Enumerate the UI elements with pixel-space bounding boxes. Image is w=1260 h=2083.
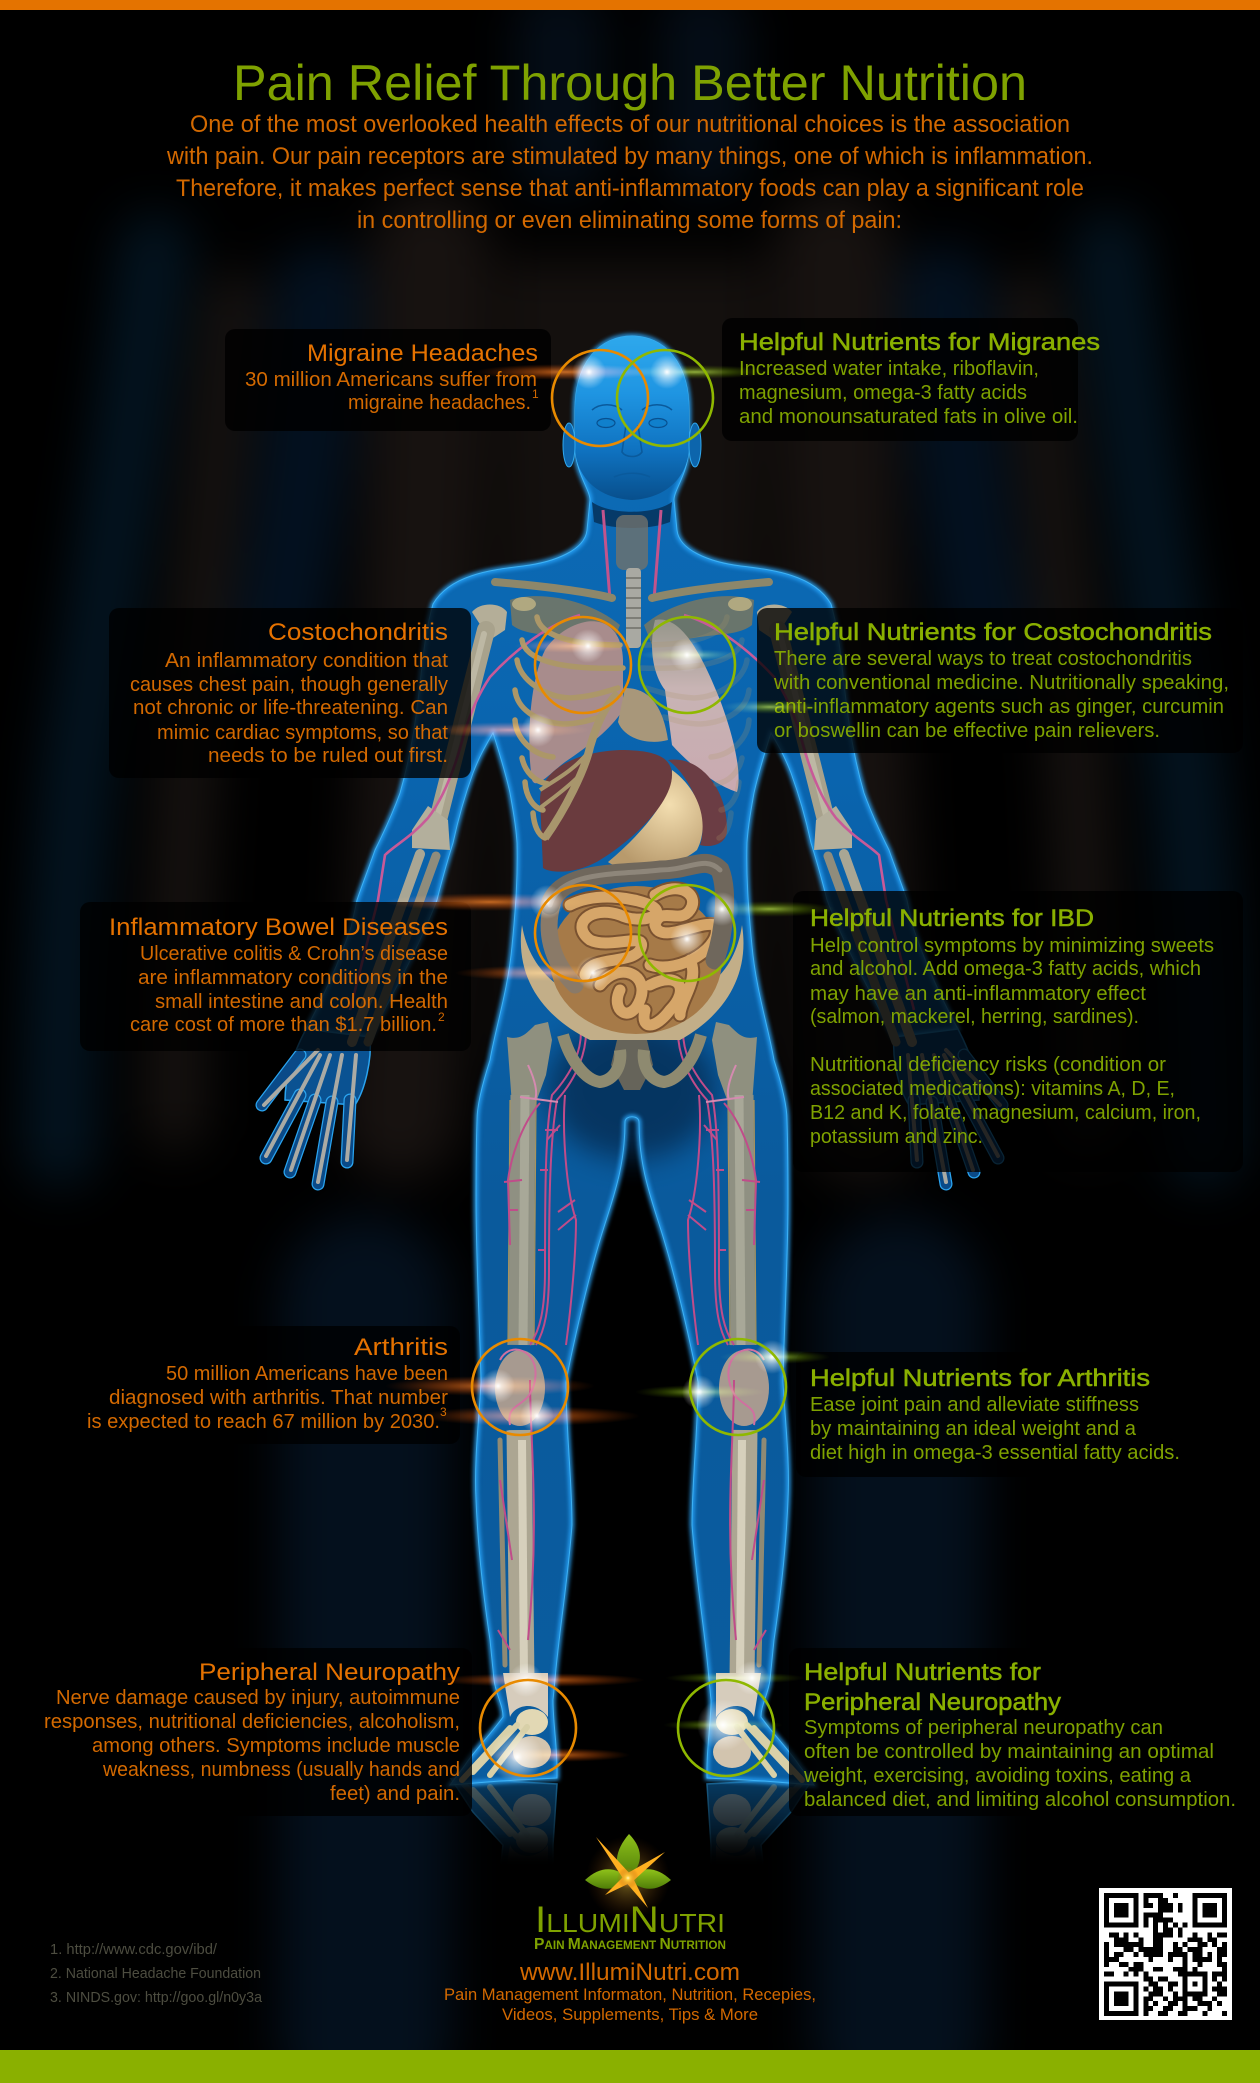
heading: Helpful Nutrients for Migranes	[739, 329, 1100, 356]
footnotes: 2. National Headache Foundation	[50, 1966, 261, 1982]
top bar	[0, 0, 1260, 10]
panel: peripheral neuropathy: weakness, numbness (usually hands and	[102, 1759, 460, 1781]
panel: nutrients for peripheral neuropathy: balanced diet, and limiting alcohol consumption.	[804, 1789, 1236, 1811]
ribcage	[515, 617, 749, 838]
panel: arthritis: 3	[440, 1405, 447, 1419]
heading: Peripheral Neuropathy	[199, 1659, 460, 1686]
panel: peripheral neuropathy: feet) and pain.	[330, 1783, 460, 1805]
heading: Arthritis	[354, 1334, 448, 1361]
text block: Ease joint pain and alleviate stiffness	[810, 1394, 1139, 1416]
heading: Helpful Nutrients for	[804, 1659, 1041, 1686]
panel: migraine headaches: 1	[532, 387, 539, 401]
liver	[540, 750, 672, 872]
panel: nutrients for migraines: magnesium, omega-3 fatty acids	[739, 382, 1027, 404]
target circles: orange	[472, 350, 648, 1776]
website and description: www.IllumiNutri.com	[519, 1959, 740, 1986]
heading: Helpful Nutrients for Costochondritis	[774, 619, 1212, 646]
panel: migraine headaches	[225, 329, 551, 431]
text block: Help control symptoms by minimizing sweets	[810, 935, 1214, 957]
panel: costochondritis: causes chest pain, though generally	[130, 674, 448, 696]
panel: nutrients for peripheral neuropathy: often be controlled by maintaining an optimal	[804, 1741, 1214, 1763]
skeleton	[350, 582, 914, 1780]
title: Pain Relief Through Better Nutrition	[233, 55, 1027, 111]
pelvic bowl	[521, 925, 743, 1040]
footnotes: 1. http://www.cdc.gov/ibd/	[50, 1942, 218, 1958]
left lung	[529, 621, 623, 783]
panel: nutrients for IBD: may have an anti-inflammatory effect	[810, 983, 1146, 1005]
panel: nutrients for costochondritis	[757, 608, 1243, 753]
panel: arthritis	[80, 1326, 460, 1444]
panel: nutrients for migraines	[722, 318, 1100, 441]
text block: Nerve damage caused by injury, autoimmune	[56, 1687, 460, 1709]
panel: nutrients for arthritis	[796, 1352, 1196, 1477]
heading: Migraine Headaches	[307, 340, 538, 367]
panel: nutrients for IBD	[793, 891, 1243, 1172]
panel: inflammatory bowel diseases: small intestine and colon. Health	[155, 991, 448, 1013]
panel: nutrients for IBD: (salmon, mackerel, herring, sardines).	[810, 1006, 1139, 1028]
intro text	[166, 111, 1093, 234]
panel: arthritis: is expected to reach 67 million by 2030.	[87, 1411, 440, 1433]
text block: Symptoms of peripheral neuropathy can	[804, 1717, 1163, 1739]
logo tagline: PAIN MANAGEMENT NUTRITION	[534, 1936, 726, 1953]
heading: Inflammatory Bowel Diseases	[109, 914, 448, 941]
panel: nutrients for peripheral neuropathy: weight, exercising, avoiding toxins, eating a	[803, 1765, 1192, 1787]
target circles: green	[617, 350, 786, 1776]
panel: inflammatory bowel diseases: care cost of more than $1.7 billion.	[130, 1014, 437, 1036]
panel: inflammatory bowel diseases: 2	[438, 1010, 445, 1024]
head	[563, 336, 701, 500]
QR code	[1099, 1888, 1232, 2020]
panel: nutrients for IBD: Nutritional deficiency risks (condition or	[810, 1054, 1166, 1076]
panel: nutrients for arthritis: by maintaining an ideal weight and a	[810, 1418, 1137, 1440]
text block: Increased water intake, riboflavin,	[739, 358, 1039, 380]
bottom bar	[0, 2050, 1260, 2083]
heading: Helpful Nutrients for Arthritis	[810, 1365, 1150, 1392]
footnotes	[50, 1942, 263, 2006]
panel: nutrients for migraines: and monounsaturated fats in olive oil.	[739, 406, 1078, 428]
intro text: in controlling or even eliminating some forms of pain:	[357, 207, 902, 234]
logo mark	[585, 1834, 671, 1920]
panel: nutrients for costochondritis: with conventional medicine. Nutritionally speaking,	[773, 672, 1229, 694]
spleen	[668, 760, 727, 846]
body silhouette	[306, 336, 958, 1785]
foot reflections	[450, 1778, 813, 1854]
text block: 50 million Americans have been	[166, 1363, 448, 1385]
panel: peripheral neuropathy	[30, 1648, 472, 1816]
panel: arthritis: diagnosed with arthritis. That number	[109, 1387, 448, 1409]
panel: nutrients for peripheral neuropathy: Peripheral Neuropathy	[804, 1689, 1061, 1716]
panel: costochondritis: mimic cardiac symptoms, so that	[157, 722, 448, 744]
intro text: with pain. Our pain receptors are stimulated by many things, one of which is inflammation.	[166, 143, 1093, 170]
logo: IllumiNutri	[534, 1834, 726, 1953]
panel: inflammatory bowel diseases: are inflammatory conditions in the	[138, 967, 448, 989]
panel: nutrients for costochondritis: anti-inflammatory agents such as ginger, curcumin	[774, 696, 1224, 718]
panel: migraine headaches: migraine headaches.	[348, 392, 531, 414]
panel: costochondritis	[109, 608, 471, 778]
footnotes: 3. NINDS.gov: http://goo.gl/n0y3a	[50, 1990, 263, 2006]
right lung	[652, 620, 739, 792]
trachea	[626, 568, 641, 648]
stomach	[608, 770, 703, 868]
panel: nutrients for IBD: potassium and zinc.	[810, 1126, 983, 1148]
heading: Helpful Nutrients for IBD	[810, 905, 1094, 932]
panel: peripheral neuropathy: among others. Symptoms include muscle	[92, 1735, 460, 1757]
website and description: Videos, Supplements, Tips & More	[502, 2006, 758, 2024]
text block: An inflammatory condition that	[165, 650, 448, 672]
neck structures	[592, 502, 672, 600]
pelvis bones	[563, 1035, 701, 1090]
text block: There are several ways to treat costochondritis	[774, 648, 1192, 670]
logo wordmark: ILLUMINUTRI	[535, 1899, 725, 1940]
panel: nutrients for IBD: B12 and K, folate, magnesium, calcium, iron,	[810, 1102, 1201, 1124]
panel: nutrients for costochondritis: or boswellin can be effective pain relievers.	[774, 720, 1160, 742]
panel: peripheral neuropathy: responses, nutritional deficiencies, alcoholism,	[44, 1711, 460, 1733]
heading: Costochondritis	[268, 619, 448, 646]
panel: costochondritis: needs to be ruled out first.	[208, 745, 448, 767]
panel: nutrients for IBD: associated medications): vitamins A, D, E,	[810, 1078, 1175, 1100]
human figure	[262, 336, 1002, 1785]
text block: Ulcerative colitis & Crohn’s disease	[140, 943, 448, 965]
hands	[262, 1029, 1002, 1184]
website and description	[444, 1959, 816, 2024]
panel: costochondritis: not chronic or life-threatening. Can	[133, 697, 448, 719]
panel: nutrients for arthritis: diet high in omega-3 essential fatty acids.	[810, 1442, 1180, 1464]
heart	[618, 688, 668, 742]
panel: nutrients for peripheral neuropathy	[789, 1648, 1250, 1816]
intestines	[549, 863, 725, 1034]
website and description: Pain Management Informaton, Nutrition, Recepies,	[444, 1986, 816, 2004]
text block: 30 million Americans suffer from	[245, 369, 537, 391]
intro text: Therefore, it makes perfect sense that anti-inflammatory foods can play a significant role	[176, 175, 1084, 202]
panel: inflammatory bowel diseases	[80, 902, 471, 1051]
lens flares	[385, 355, 835, 1783]
intro text: One of the most overlooked health effects of our nutritional choices is the association	[190, 111, 1070, 138]
panel: nutrients for IBD: and alcohol. Add omega-3 fatty acids, which	[810, 958, 1201, 980]
